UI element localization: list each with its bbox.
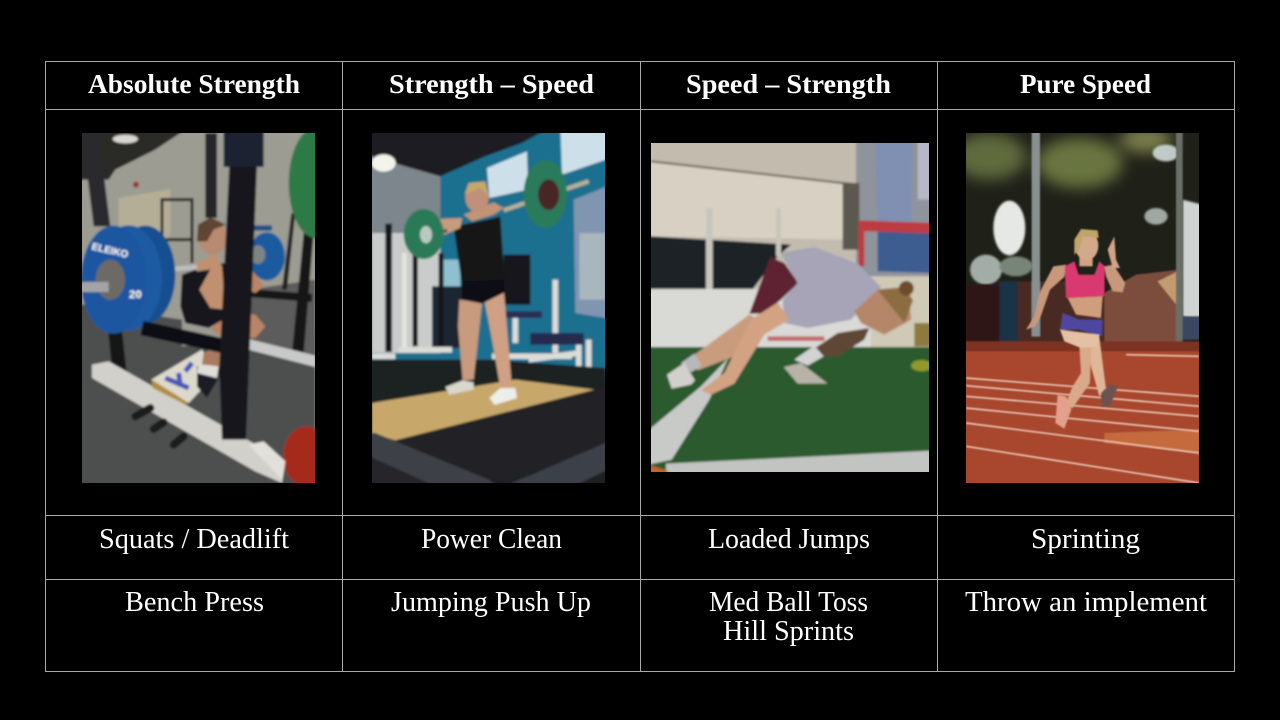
label: Med Ball Toss, Hill Sprints	[709, 586, 868, 647]
label: Bench Press: Bench Press	[125, 586, 264, 618]
heading: Pure Speed: Pure Speed	[1020, 68, 1151, 99]
gym equipment	[432, 286, 465, 348]
photo: athlete performing a power clean	[372, 133, 605, 483]
red plate	[282, 425, 315, 483]
near plates	[137, 224, 177, 325]
heading: Absolute Strength: Absolute Strength	[88, 68, 300, 99]
handles	[135, 408, 184, 445]
turf	[651, 345, 929, 472]
label: Sprinting: Sprinting	[1031, 523, 1140, 555]
heading: Strength – Speed: Strength – Speed	[389, 68, 594, 99]
heading: Speed – Strength: Speed – Strength	[686, 68, 891, 99]
label: Throw an implement: Throw an implement	[965, 586, 1207, 618]
lifter	[196, 366, 221, 398]
label: Loaded Jumps: Loaded Jumps	[708, 523, 870, 555]
row 3 labels	[125, 586, 1207, 647]
label: Squats / Deadlift: Squats / Deadlift	[99, 523, 289, 555]
far plate	[249, 232, 285, 280]
main upright	[219, 165, 257, 440]
table grid	[45, 61, 1235, 672]
photo: sprinter on a track	[966, 133, 1199, 483]
barbell	[504, 181, 589, 210]
label: Med Ball Toss, Hill Sprints: Hill Sprints	[723, 615, 854, 647]
sprinter	[1026, 229, 1125, 429]
photo: athlete squatting in a rack: 20	[129, 289, 142, 301]
photo: athlete squatting in a rack	[82, 133, 315, 483]
beam	[142, 328, 225, 346]
label: Jumping Push Up: Jumping Push Up	[391, 586, 591, 618]
photo: athlete explosive lunge on turf	[651, 143, 929, 472]
back and front rails	[249, 339, 315, 367]
floor	[372, 358, 605, 483]
photo: athlete squatting in a rack: ELEIKO	[90, 242, 129, 261]
athlete	[458, 300, 482, 380]
wooden platform	[372, 380, 595, 440]
athlete	[694, 314, 755, 372]
row 2 labels	[99, 523, 1140, 555]
green plate	[288, 133, 315, 239]
plate box	[150, 348, 206, 404]
label: Med Ball Toss, Hill Sprints: Med Ball Toss	[709, 586, 868, 618]
label: Power Clean: Power Clean	[421, 523, 562, 555]
